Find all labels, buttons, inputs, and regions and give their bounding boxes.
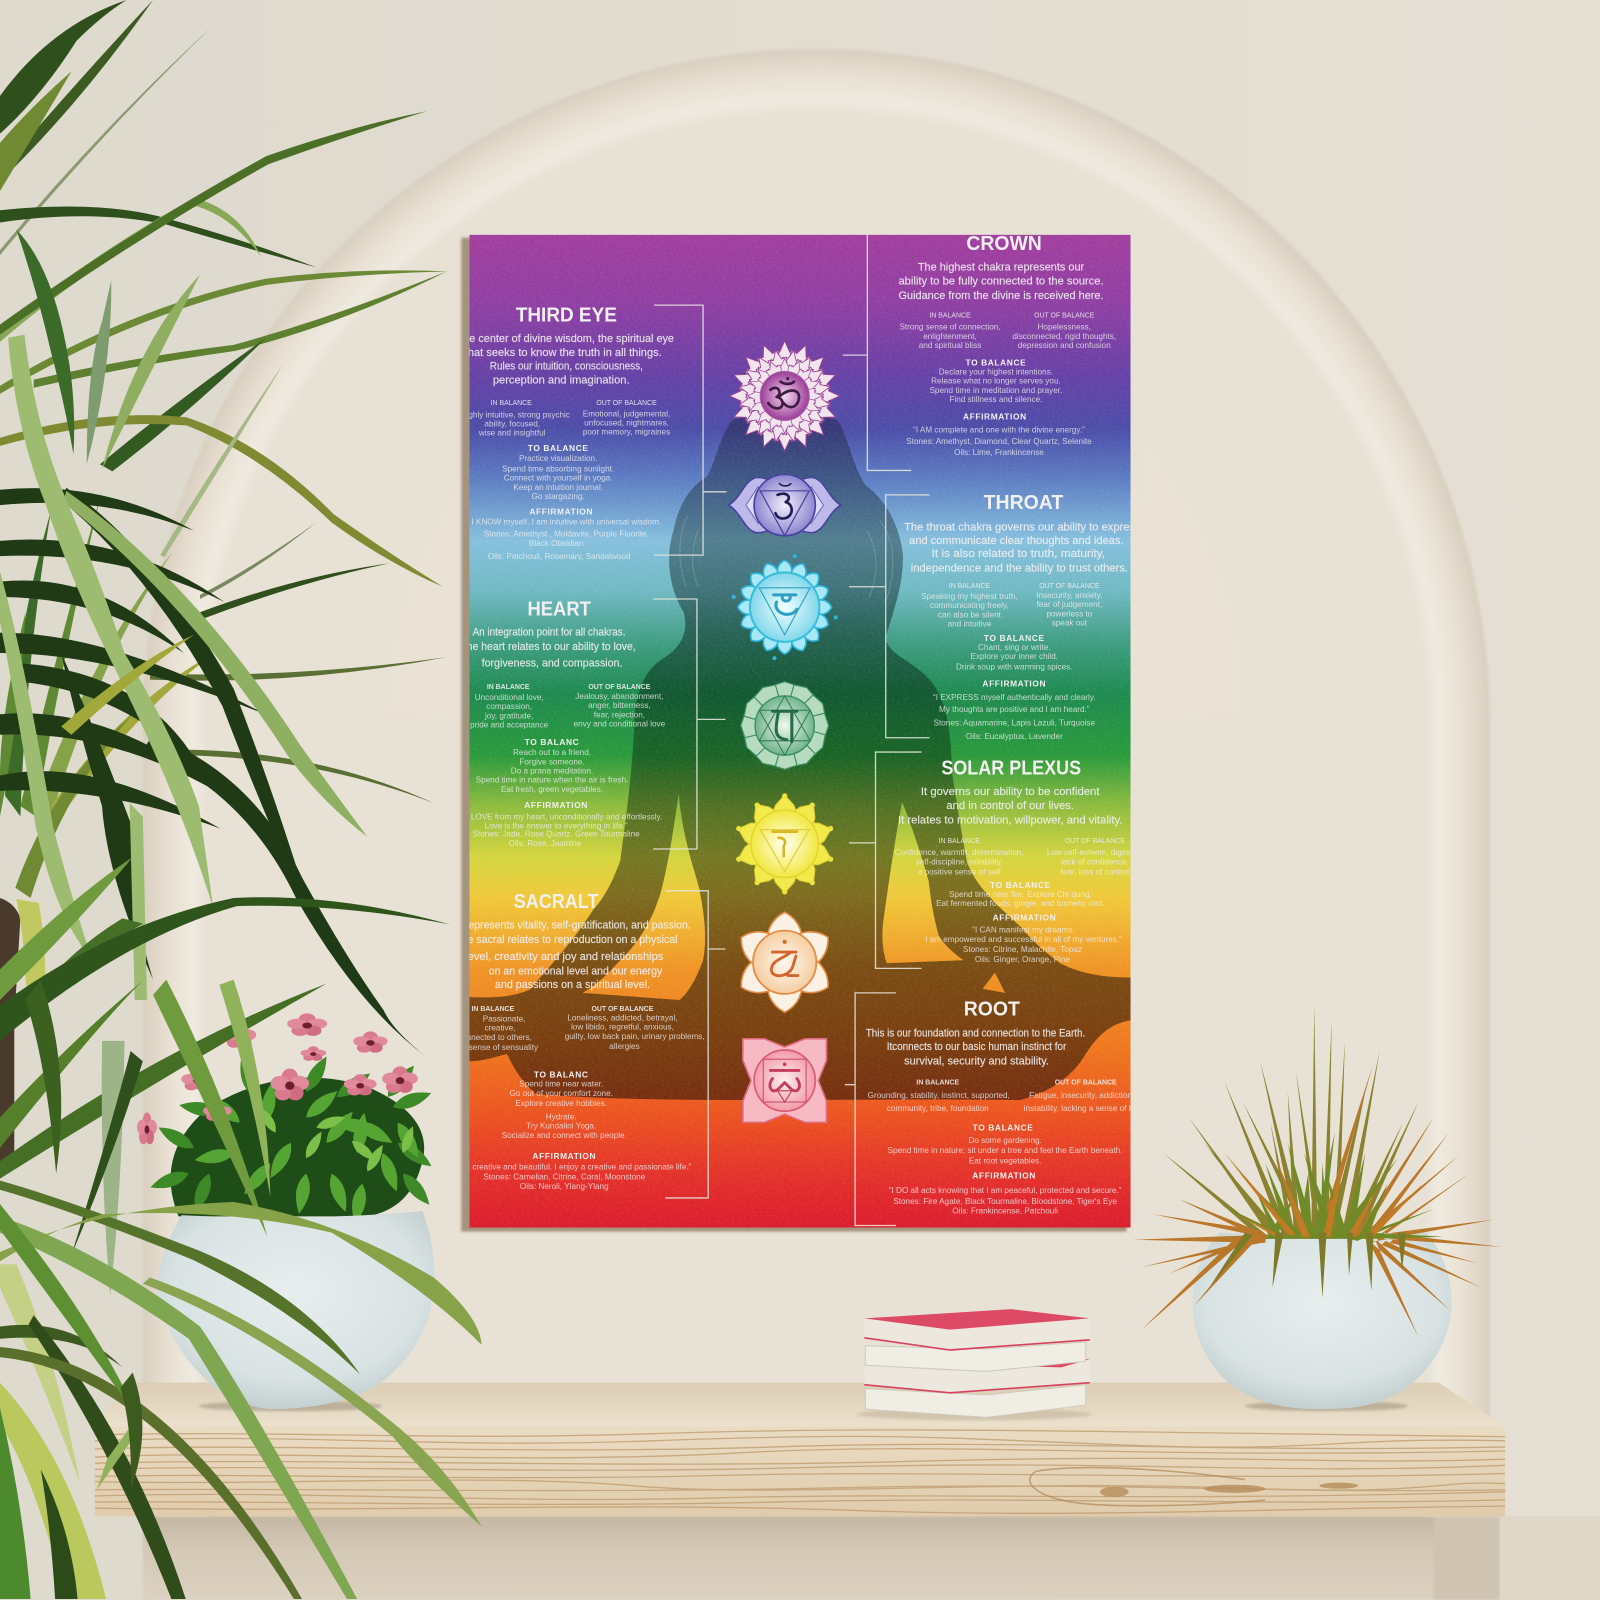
text block: crown: Spend time in meditation and prayer. bbox=[929, 386, 1062, 395]
text block: third eye: that seeks to know the truth in all things. bbox=[465, 347, 662, 359]
text block: heart: AFFIRMATION bbox=[524, 800, 588, 810]
text block: sacral: Go out of your comfort zone. bbox=[510, 1089, 613, 1098]
text block: root: instability, lacking a sense of belonging bbox=[1024, 1104, 1165, 1113]
text block: throat: Drink soup with warming spices. bbox=[956, 662, 1073, 671]
text block: throat: speak out bbox=[1052, 619, 1088, 628]
text block: sacral: Spend time near water. bbox=[519, 1080, 603, 1089]
text block: crown: OUT OF BALANCE bbox=[1034, 312, 1095, 319]
text block: sacral: OUT OF BALANCE bbox=[591, 1006, 654, 1013]
text block: heart: forgiveness, and compassion. bbox=[482, 657, 622, 669]
text block: heart: I LOVE from my heart, unconditionally and effortlessly. bbox=[466, 812, 662, 821]
text block: root: ROOT bbox=[964, 998, 1020, 1020]
text block: heart: compassion, bbox=[486, 702, 532, 711]
text block: sacral: “I am creative and beautiful. I enjoy a creative and passionate life.” bbox=[452, 1162, 692, 1171]
text block: root: “I DO all acts knowing that I am peaceful, protected and secure.” bbox=[889, 1186, 1122, 1195]
text block: crown: Stones: Amethyst, Diamond, Clear Quartz, Selenite bbox=[906, 437, 1092, 446]
wall below the shelf, right of the niche bbox=[1500, 1516, 1600, 1600]
light central blades bbox=[0, 335, 450, 1041]
text block: third eye: Practice visualization. bbox=[519, 454, 597, 463]
hair strands bbox=[680, 515, 893, 602]
text block: throat bbox=[904, 492, 1141, 741]
dark central blades bbox=[0, 488, 427, 1057]
text block: root: Grounding, stability, instinct, supported, bbox=[868, 1091, 1010, 1100]
text block: crown: Find stillness and silence. bbox=[949, 395, 1042, 404]
pot: white bowl bbox=[158, 1211, 434, 1409]
text block: third eye: Keep an intuition journal. bbox=[513, 483, 603, 492]
text block: crown: ability to be fully connected to the source. bbox=[898, 276, 1104, 288]
text block: solar plexus: Oils: Ginger, Orange, Pine bbox=[975, 955, 1071, 964]
text block: solar plexus: TO BALANCE bbox=[990, 880, 1051, 890]
text block: throat: OUT OF BALANCE bbox=[1039, 583, 1100, 590]
text block: solar plexus: It governs our ability to be confident bbox=[921, 786, 1099, 798]
canvas texture bbox=[469, 235, 1131, 1228]
text block: root: Spend time in nature; sit under a tree and feel the Earth beneath. bbox=[888, 1146, 1123, 1155]
text block: heart: Oils: Rose, Jasmine bbox=[509, 839, 582, 848]
text block: solar plexus: a positive sense of self bbox=[918, 867, 1001, 876]
text block: throat: TO BALANCE bbox=[984, 633, 1045, 643]
text block: sacral: Loneliness, addicted, betrayal, bbox=[567, 1013, 678, 1022]
text block: solar plexus: Stones: Citrine, Malachite, Topaz bbox=[963, 945, 1082, 954]
right pot with grass bbox=[1133, 1005, 1502, 1411]
text block: third eye bbox=[457, 304, 674, 561]
text block: third eye: Stones: Amethyst , Moldavite, Purple Fluorite, bbox=[484, 530, 649, 539]
text block: heart: joy, gratitude, bbox=[484, 711, 533, 720]
text block: throat: Chant, sing or write. bbox=[978, 643, 1051, 652]
text block: heart: Spend time in nature when the air is fresh. bbox=[476, 776, 628, 785]
flowering plant foliage bbox=[148, 1053, 435, 1225]
text block: crown: Declare your highest intentions. bbox=[939, 367, 1053, 376]
text block: sacral: Oils: Neroli, Ylang-Ylang bbox=[520, 1182, 609, 1191]
text block: crown: depression and confusion bbox=[1018, 341, 1111, 350]
text block: crown: CROWN bbox=[966, 233, 1042, 255]
text block: root: This is our foundation and connection to the Earth. bbox=[866, 1028, 1085, 1040]
text block: solar plexus: Low self-esteem, digestive bbox=[1047, 848, 1143, 857]
text block: solar plexus: I am empowered and successful in all of my ventures.” bbox=[925, 935, 1122, 944]
leader lines bbox=[653, 235, 930, 1226]
text block: heart: OUT OF BALANCE bbox=[588, 684, 651, 691]
text block: throat: THROAT bbox=[984, 492, 1064, 514]
text block: sacral: creative, bbox=[485, 1024, 515, 1033]
text block: heart: fear, rejection, bbox=[594, 710, 645, 719]
text block: throat: AFFIRMATION bbox=[982, 679, 1046, 689]
poster rainbow background bbox=[469, 235, 1131, 1228]
chakra: root bbox=[743, 1039, 827, 1122]
chakra: solar plexus bbox=[734, 793, 835, 894]
text block: third eye: unfocused, nightmares, bbox=[584, 419, 669, 428]
text block: sacral: It represents vitality, self-gratification, and passion. bbox=[456, 920, 691, 932]
pink flowers bbox=[137, 1013, 418, 1144]
text block: sacral: Hydrate. bbox=[546, 1112, 577, 1121]
text block: root: AFFIRMATION bbox=[972, 1171, 1036, 1181]
text block: third eye: TO BALANCE bbox=[528, 443, 589, 453]
text block: crown: enlightenment, bbox=[923, 332, 977, 341]
text block: solar plexus: lack of confidence, bbox=[1061, 857, 1129, 866]
text block: sacral: low libido, regretful, anxious, bbox=[571, 1023, 674, 1032]
text block: third eye: Highly intuitive, strong psychic bbox=[461, 410, 570, 419]
text block: solar plexus: Confidence, warmth, determination, bbox=[895, 848, 1024, 857]
text block: crown: “I AM complete and one with the divine energy.” bbox=[913, 426, 1085, 435]
text block: heart: Jealousy, abandonment, bbox=[575, 692, 664, 701]
text block: throat: “I EXPRESS myself authentically and clearly. bbox=[933, 693, 1096, 702]
text block: heart: The heart relates to our ability to love, bbox=[460, 641, 636, 653]
text block: crown: IN BALANCE bbox=[929, 312, 971, 319]
text block: root: IN BALANCE bbox=[916, 1080, 959, 1087]
text block: sacral: Stones: Carnelian, Citrine, Coral, Moonstone bbox=[483, 1173, 646, 1182]
text block: crown: The highest chakra represents our bbox=[918, 261, 1085, 273]
text block: crown bbox=[898, 233, 1116, 457]
text block: sacral: SACRALT bbox=[514, 891, 599, 913]
text block: solar plexus: “I CAN manifest my dreams. bbox=[972, 926, 1075, 935]
text block: root bbox=[866, 998, 1165, 1215]
text block: solar plexus: OUT OF BALANCE bbox=[1065, 838, 1125, 845]
text block: crown: Oils: Lime, Frankincense bbox=[954, 448, 1044, 457]
text block: throat: My thoughts are positive and I am heard.” bbox=[939, 705, 1090, 714]
text block: throat: It is also related to truth, maturity, bbox=[932, 548, 1105, 560]
text block: heart: Stones: Jade, Rose Quartz, Green Tourmaline bbox=[473, 830, 640, 839]
text block: throat: communicating freely, bbox=[930, 601, 1009, 610]
text block: third eye: perception and imagination. bbox=[493, 375, 630, 387]
text block: sacral: The sacral relates to reproduction on a physical bbox=[455, 934, 678, 946]
canvas shadow bbox=[461, 238, 1127, 1232]
text block: third eye: Go stargazing. bbox=[532, 492, 585, 501]
text block: solar plexus: Eat fermented foods, ginger, and turmeric root. bbox=[936, 899, 1105, 908]
text block: sacral: IN BALANCE bbox=[472, 1006, 515, 1013]
shelf bbox=[95, 1383, 1505, 1516]
text block: solar plexus: SOLAR PLEXUS bbox=[941, 757, 1081, 779]
text block: third eye: poor memory, migraines bbox=[583, 428, 670, 437]
text block: sacral: and passions on a spiritual level. bbox=[495, 979, 650, 991]
text block: heart: Reach out to a friend. bbox=[513, 748, 591, 757]
chakra: third eye bbox=[729, 474, 841, 536]
meditating silhouette bbox=[469, 413, 1131, 1100]
text block: crown: TO BALANCE bbox=[966, 357, 1026, 367]
text block: heart: IN BALANCE bbox=[487, 684, 530, 691]
text block: root: Fatigue, insecurity, addictions, bbox=[1029, 1091, 1138, 1100]
text block: root: OUT OF BALANCE bbox=[1055, 1080, 1117, 1087]
trunk bbox=[0, 898, 20, 1173]
text block: sacral: a sense of sensuality bbox=[462, 1043, 539, 1052]
text block: sacral: Passionate, bbox=[483, 1014, 525, 1023]
text block: root: TO BALANCE bbox=[973, 1123, 1033, 1133]
text block: root: Stones: Fire Agate, Black Tourmaline, Bloodstone, Tiger's Eye bbox=[893, 1197, 1117, 1206]
text block: heart: anger, bitterness, bbox=[588, 701, 651, 710]
chakra: crown bbox=[729, 341, 840, 451]
text block: crown: Hopelessness, bbox=[1038, 323, 1091, 332]
text block: heart: pride and acceptance bbox=[470, 721, 549, 730]
text block: third eye: THIRD EYE bbox=[516, 304, 617, 326]
text block: heart: Unconditional love, bbox=[475, 693, 544, 702]
text block: root: Do some gardening. bbox=[968, 1136, 1042, 1145]
text block: third eye: AFFIRMATION bbox=[529, 506, 593, 516]
text block: heart: Do a prana meditation. bbox=[511, 766, 593, 775]
text block: throat: Stones: Aquamarine, Lapis Lazuli, Turquoise bbox=[934, 719, 1095, 728]
text block: third eye: Oils: Patchouli, Rosemary, Sandalwood bbox=[488, 552, 631, 561]
text block: crown: Guidance from the divine is received here. bbox=[898, 290, 1104, 302]
text block: sacral: AFFIRMATION bbox=[532, 1151, 596, 1161]
text block: heart: envy and conditional love bbox=[574, 720, 666, 729]
text block: throat: can also be silent bbox=[938, 610, 1002, 619]
dracaena plant in the foreground bbox=[0, 0, 482, 1599]
left pot with flowering plant bbox=[137, 1013, 435, 1411]
text block: throat: and intuitive bbox=[948, 620, 992, 629]
text block: throat: The throat chakra governs our ability to express bbox=[904, 522, 1141, 534]
text block: sacral bbox=[452, 891, 705, 1191]
text block: sacral: connected to others, bbox=[458, 1033, 532, 1042]
text block: third eye: Emotional, judgemental, bbox=[583, 409, 670, 418]
lower upper-plant blades bbox=[0, 980, 327, 1296]
text block: sacral: TO BALANC bbox=[534, 1070, 589, 1080]
text block: throat: fear of judgement, bbox=[1037, 600, 1102, 609]
text block: root: survival, security and stability. bbox=[904, 1055, 1049, 1067]
text block: solar plexus: fear, loss of control bbox=[1061, 867, 1129, 876]
text block: root: Oils: Frankincense, Patchouli bbox=[952, 1206, 1058, 1215]
text block: third eye: IN BALANCE bbox=[491, 400, 532, 407]
text block: third eye: I KNOW myself. I am intuitive with universal wisdom. bbox=[471, 517, 661, 526]
text block: crown: and spiritual bliss bbox=[919, 341, 981, 350]
text block: heart: An integration point for all chakras. bbox=[472, 627, 626, 639]
text block: throat: powerless to bbox=[1046, 609, 1093, 618]
text block: crown: disconnected, rigid thoughts, bbox=[1012, 332, 1116, 341]
text block: throat: Insecurity, anxiety, bbox=[1036, 591, 1103, 600]
grass blades bbox=[1133, 1005, 1502, 1337]
text block: heart: Forgive someone. bbox=[519, 757, 585, 766]
text block: sacral: allergies bbox=[609, 1042, 640, 1051]
chakra: heart bbox=[741, 681, 829, 770]
chakra: throat bbox=[732, 554, 838, 660]
text block: third eye: Rules our intuition, consciousness, bbox=[490, 360, 643, 372]
text block: solar plexus: and in control of our lives. bbox=[946, 800, 1074, 812]
text block: sacral: on an emotional level and our energy bbox=[489, 965, 663, 977]
text block: throat: Speaking my highest truth, bbox=[921, 592, 1018, 601]
text block: crown: Release what no longer serves you. bbox=[931, 377, 1061, 386]
text block: solar plexus: AFFIRMATION bbox=[993, 912, 1056, 922]
text block: solar plexus: It relates to motivation, willpower, and vitality. bbox=[898, 814, 1122, 826]
text block: sacral: Explore creative hobbies. bbox=[515, 1099, 607, 1108]
text block: solar plexus: Spend time near fire. Explore Chi qung. bbox=[949, 890, 1092, 899]
text block: third eye: OUT OF BALANCE bbox=[596, 400, 657, 407]
text block: throat: Explore your inner child. bbox=[971, 652, 1058, 661]
text block: sacral: level, creativity and joy and relationships bbox=[465, 951, 664, 963]
lower blades bbox=[0, 1181, 482, 1599]
text block: third eye: Black Obsidian bbox=[529, 539, 583, 548]
text block: heart: Eat fresh, green vegetables. bbox=[501, 785, 603, 794]
text block: sacral: Socialize and connect with people. bbox=[502, 1131, 627, 1140]
text block: throat: independence and the ability to trust others. bbox=[911, 562, 1128, 574]
text block: heart: TO BALANC bbox=[525, 737, 579, 747]
central fan of blades bbox=[0, 490, 214, 898]
pot: round white planter bbox=[1193, 1233, 1452, 1409]
text block: throat: Oils: Eucalyptus, Lavender bbox=[966, 732, 1063, 741]
text block: root: community, tribe, foundation bbox=[887, 1104, 989, 1113]
text block: root: Itconnects to our basic human instinct for bbox=[887, 1041, 1067, 1053]
text block: third eye: ability, focused, bbox=[484, 420, 540, 429]
text block: crown: AFFIRMATION bbox=[963, 411, 1027, 421]
text block: solar plexus bbox=[895, 757, 1143, 964]
text block: sacral: guilty, low back pain, urinary problems, bbox=[565, 1032, 705, 1041]
text block: solar plexus: self-discipline, reliability, bbox=[916, 857, 1003, 866]
text block: throat: IN BALANCE bbox=[949, 583, 990, 590]
text block: third eye: Spend time absorbing sunlight. bbox=[502, 464, 614, 473]
text block: heart: HEART bbox=[528, 598, 591, 620]
text block: heart: Love is the answer to everything in life.” bbox=[484, 822, 628, 831]
upper blades bbox=[0, 0, 449, 803]
chakra poster bbox=[452, 233, 1165, 1228]
text block: solar plexus: IN BALANCE bbox=[939, 838, 980, 845]
text block: third eye: The center of divine wisdom, the spiritual eye bbox=[457, 333, 674, 345]
text block: heart bbox=[460, 598, 666, 848]
text block: root: Eat root vegetables. bbox=[969, 1156, 1041, 1165]
text block: third eye: Connect with yourself in yoga. bbox=[504, 474, 613, 483]
text block: sacral: Try Kundalini Yoga. bbox=[526, 1122, 596, 1131]
stack of books bbox=[857, 1309, 1092, 1420]
chakra: sacral bbox=[740, 911, 829, 1014]
text block: crown: Strong sense of connection, bbox=[899, 323, 1001, 332]
text block: third eye: wise and insightful bbox=[478, 429, 546, 438]
text block: throat: and communicate clear thoughts and ideas. bbox=[909, 535, 1123, 547]
